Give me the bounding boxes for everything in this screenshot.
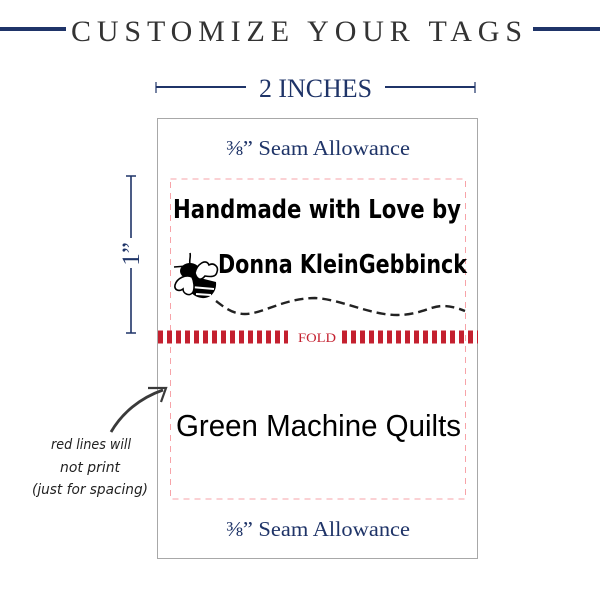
height dimension: 1 inch: 1” — [118, 242, 145, 266]
icon: bee — [174, 253, 217, 298]
seam allowance bottom label: ⅜” Seam Allowance — [226, 517, 410, 541]
seam allowance top label: ⅜” Seam Allowance — [226, 136, 410, 160]
tag text: name: Donna KleinGebbinck — [218, 250, 468, 280]
handwritten note: red lines will — [51, 437, 131, 453]
height dimension: 1 inch — [118, 176, 145, 333]
fold line: FOLD — [298, 330, 336, 345]
width dimension: 2 inches: 2 INCHES — [259, 74, 372, 103]
dashed flight path — [216, 298, 465, 315]
tag text: business name: Green Machine Quilts — [176, 408, 461, 443]
title: CUSTOMIZE YOUR TAGS — [71, 15, 522, 48]
tag text: handmade with love by: Handmade with Love by — [173, 195, 461, 225]
spacing guide dashed rectangle — [170, 179, 466, 499]
tag panel — [158, 118, 478, 558]
width dimension: 2 inches — [156, 74, 475, 103]
handwritten note: (just for spacing) — [32, 482, 148, 498]
handwritten note — [32, 437, 148, 498]
handwritten note: not print — [60, 460, 120, 476]
arrow to guide lines — [111, 388, 166, 432]
